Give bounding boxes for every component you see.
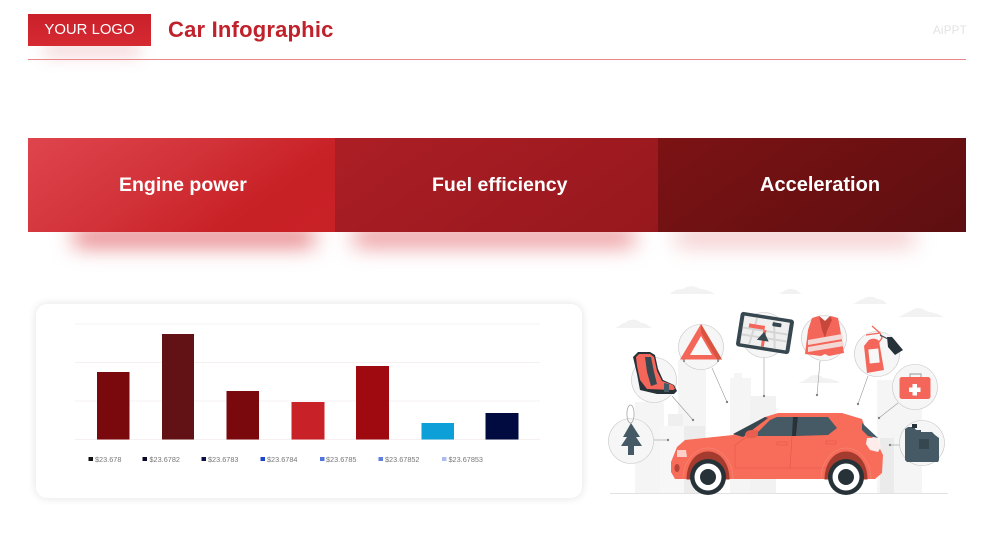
logo badge: YOUR LOGO <box>44 22 135 38</box>
chart legend: $23.67853 <box>448 455 483 464</box>
panel: fuel efficiency <box>335 138 658 232</box>
icon: first aid kit <box>900 374 930 399</box>
wheel arches <box>686 452 730 480</box>
chart legend: $23.678 <box>95 455 121 464</box>
label: engine power: Engine power <box>119 174 247 196</box>
leader lines <box>654 357 900 446</box>
lights <box>677 450 687 457</box>
ground line <box>610 492 948 494</box>
city skyline <box>635 360 922 493</box>
windows <box>754 417 795 436</box>
icon circles <box>608 312 944 466</box>
logo shadow <box>44 44 140 56</box>
banner shadow: engine power <box>74 228 314 246</box>
label: acceleration: Acceleration <box>760 174 880 196</box>
chart legend: $23.6784 <box>267 455 297 464</box>
icon: child car seat <box>633 352 677 394</box>
windshield strip <box>733 417 768 437</box>
chart legend: $23.6783 <box>208 455 238 464</box>
icon: jerry can <box>905 424 939 462</box>
label: fuel efficiency: Fuel efficiency <box>432 174 567 196</box>
panel: chart card <box>36 304 582 498</box>
header rule <box>28 59 966 60</box>
icon: air freshener tree <box>621 405 642 455</box>
car <box>671 413 883 495</box>
chart legend: $23.6785 <box>326 455 356 464</box>
icon: warning triangle <box>680 324 722 362</box>
icon: fire extinguisher <box>864 326 903 373</box>
chart legend: $23.67852 <box>385 455 420 464</box>
door seams and handles <box>735 436 828 468</box>
panel: engine power <box>28 138 335 232</box>
icon: safety vest <box>805 316 844 356</box>
title: Car Infographic <box>168 17 334 42</box>
banner shadow: fuel efficiency <box>354 228 634 246</box>
brand mark: AiPPT <box>933 24 967 37</box>
chart legend: $23.6782 <box>150 455 180 464</box>
mirror <box>745 430 758 438</box>
panel: acceleration <box>658 138 966 232</box>
wheels <box>690 459 726 495</box>
banner shadow: acceleration <box>676 228 914 246</box>
clouds <box>615 286 944 383</box>
logo badge <box>28 14 151 46</box>
icon: navigation tablet <box>736 311 794 355</box>
